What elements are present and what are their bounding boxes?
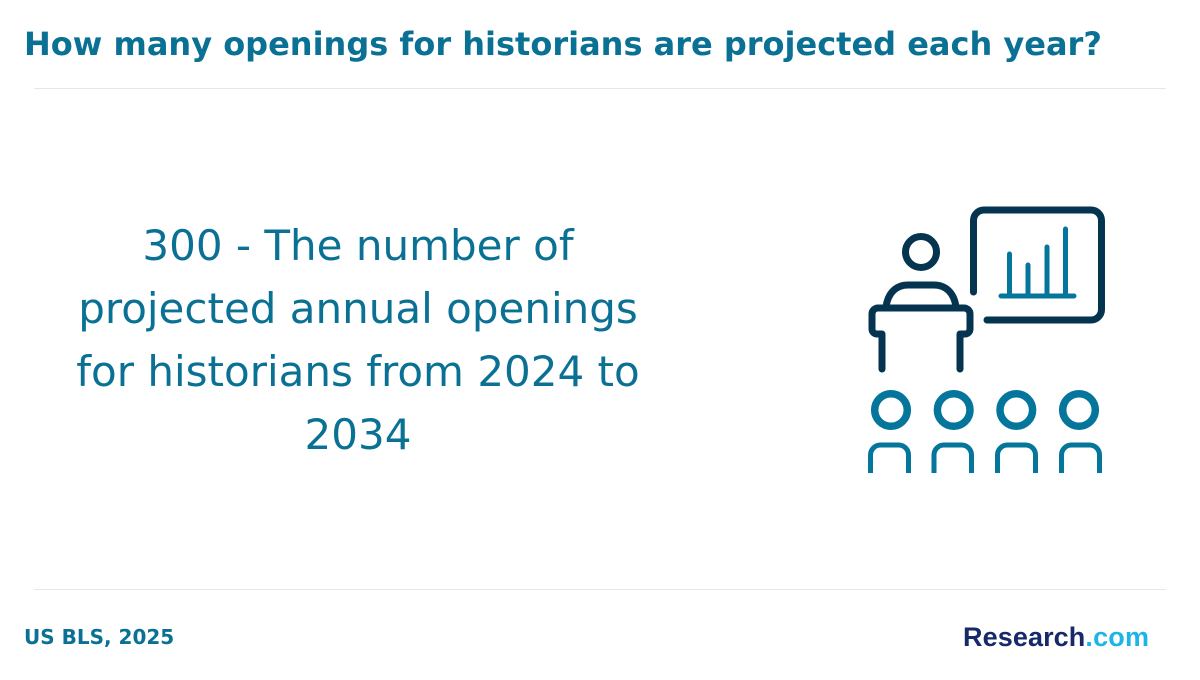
logo: Research.com (963, 622, 1149, 652)
icon: presenter with chart and audience (868, 206, 1105, 473)
main statement: for historians from 2024 to (76, 347, 640, 396)
icon: presenter (872, 236, 970, 369)
main statement: 300 - The number of (142, 221, 574, 270)
main statement (76, 221, 640, 459)
main statement: projected annual openings (78, 284, 638, 333)
source: US BLS, 2025 (24, 625, 174, 649)
icon: audience (870, 394, 1100, 473)
icon: presentation board (974, 210, 1102, 320)
icon: bar chart (1001, 229, 1074, 296)
main statement: 2034 (305, 410, 411, 459)
title: How many openings for historians are projected each year? (24, 25, 1102, 63)
